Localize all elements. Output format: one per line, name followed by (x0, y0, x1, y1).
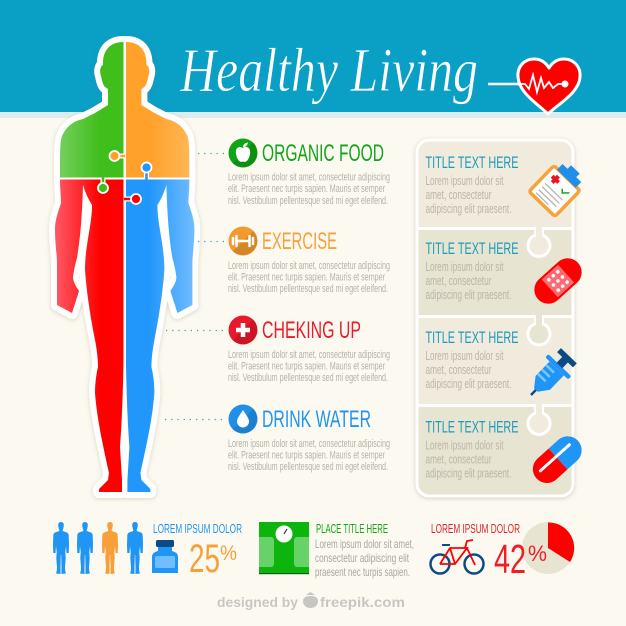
text block: Lorem ipsum dolor sit amet, consectetur adipiscing (228, 260, 390, 272)
label: PLACE TITLE HERE (316, 521, 388, 536)
pie chart (522, 522, 574, 574)
icon: apple (228, 138, 258, 168)
footer credit: freepik.com (320, 594, 405, 610)
title: Healthy Living (179, 37, 478, 105)
puzzle knob: orange (110, 151, 125, 161)
row 4 text: Lorem ipsum dolor sit (426, 438, 504, 452)
label: LOREM IPSUM DOLOR (431, 521, 520, 536)
heading: EXERCISE (262, 228, 337, 255)
text block: praesent nec turpis sapien. (315, 565, 410, 579)
person: blue (53, 522, 69, 574)
people pictogram row (53, 522, 143, 574)
body part: blue lower right (126, 178, 194, 492)
text block: nisl. Vestibulum pellentesque sed mi eget eleifend. (228, 195, 388, 207)
value: % (220, 542, 237, 565)
person: orange (102, 522, 118, 574)
icon: jar (152, 540, 178, 573)
row 4 text (426, 418, 518, 480)
puzzle knob: blue (142, 162, 152, 180)
footer credit: designed by (217, 594, 298, 610)
row 3 text: Lorem ipsum dolor sit (426, 348, 504, 363)
text block: elit. Praesent nec turpis sapien. Mauris et semper (228, 183, 385, 195)
icon: syringe (519, 345, 580, 406)
icon: bicycle (430, 540, 484, 574)
row 2 text (426, 239, 518, 302)
heading: CHEKING UP (262, 317, 361, 344)
row 4 text: TITLE TEXT HERE (426, 418, 518, 436)
heading: DRINK WATER (262, 406, 371, 433)
person: blue (77, 522, 93, 574)
text block: nisl. Vestibulum pellentesque sed mi eget eleifend. (228, 283, 388, 295)
row 3 text: adipiscing elit praesent. (426, 376, 512, 391)
text block: Lorem ipsum dolor sit amet, consectetur adipiscing (228, 349, 390, 361)
text block (228, 438, 390, 473)
body part: orange upper right (126, 42, 189, 178)
icon: bandage (529, 253, 587, 309)
icon: dumbbell (228, 226, 258, 256)
icon: clipboard (529, 157, 588, 216)
row 3 text (426, 328, 518, 391)
dotted connector lines (165, 154, 226, 420)
body outline (55, 42, 194, 492)
footer credit (217, 592, 405, 610)
icon: capsule (527, 431, 587, 489)
icon: heart with pulse line (488, 59, 580, 114)
text block: Lorem ipsum dolor sit amet, consectetur adipiscing (228, 172, 390, 184)
puzzle socket row 4 (526, 403, 552, 436)
row 3 text: TITLE TEXT HERE (426, 328, 518, 347)
puzzle knob: red (124, 194, 141, 204)
row 1 text (426, 153, 518, 216)
value: 42 (494, 536, 526, 582)
icon: freepik (303, 592, 318, 608)
body seams (60, 42, 190, 494)
text block: nisl. Vestibulum pellentesque sed mi eget eleifend. (228, 372, 388, 384)
text block (228, 260, 390, 295)
row 4 text: adipiscing elit praesent. (426, 466, 512, 480)
icon: weighing scale (259, 522, 309, 574)
label: LOREM IPSUM DOLOR (153, 521, 242, 536)
puzzle socket row 3 (526, 314, 552, 346)
row dividers (418, 228, 572, 406)
stat: 25 percent (152, 521, 242, 581)
row 1 text: Lorem ipsum dolor sit (426, 173, 504, 188)
puzzle socket row 2 (526, 226, 552, 258)
panel: puzzle column (417, 140, 588, 496)
body part: green upper left (60, 42, 124, 178)
body part: red lower left (55, 178, 124, 492)
row 2 text: TITLE TEXT HERE (426, 239, 518, 258)
panel shell (417, 140, 573, 496)
row 1 text: TITLE TEXT HERE (426, 153, 518, 172)
text block: elit. Praesent nec turpis sapien. Mauris et semper (228, 272, 385, 284)
row 2 text: adipiscing elit praesent. (426, 287, 512, 302)
section: organic food (228, 138, 390, 207)
row 2 text: Lorem ipsum dolor sit (426, 259, 504, 274)
text block (228, 172, 390, 207)
row backgrounds (418, 229, 572, 494)
icon: water drop (228, 404, 258, 434)
value: % (528, 541, 547, 566)
section: drink water (228, 404, 390, 473)
text block (315, 537, 414, 579)
text block: elit. Praesent nec turpis sapien. Mauris et semper (228, 360, 385, 372)
stat: place title (315, 521, 414, 579)
text block: Lorem ipsum dolor sit amet, consectetur adipiscing (228, 438, 390, 450)
text block: Lorem ipsum dolor sit amet, (315, 537, 414, 551)
stat: 42 percent (430, 521, 547, 582)
text block: nisl. Vestibulum pellentesque sed mi eget eleifend. (228, 461, 388, 473)
heading: ORGANIC FOOD (262, 140, 384, 167)
row 1 text: amet, consectetur (426, 187, 492, 202)
text block (228, 349, 390, 384)
row 3 text: amet, consectetur (426, 362, 492, 377)
header band (0, 0, 626, 118)
icon: medical cross (228, 316, 258, 344)
section: cheking up (228, 316, 390, 384)
value: 25 (189, 537, 220, 581)
text block: consectetur adipiscing elit (315, 551, 409, 565)
row 2 text: amet, consectetur (426, 273, 492, 288)
row 4 text: amet, consectetur (426, 452, 492, 466)
text block: elit. Praesent nec turpis sapien. Mauris et semper (228, 450, 385, 462)
puzzle knob: green (98, 178, 108, 193)
body figure (55, 42, 194, 494)
person: blue (127, 522, 143, 574)
row 1 text: adipiscing elit praesent. (426, 201, 512, 216)
section: exercise (228, 226, 390, 295)
